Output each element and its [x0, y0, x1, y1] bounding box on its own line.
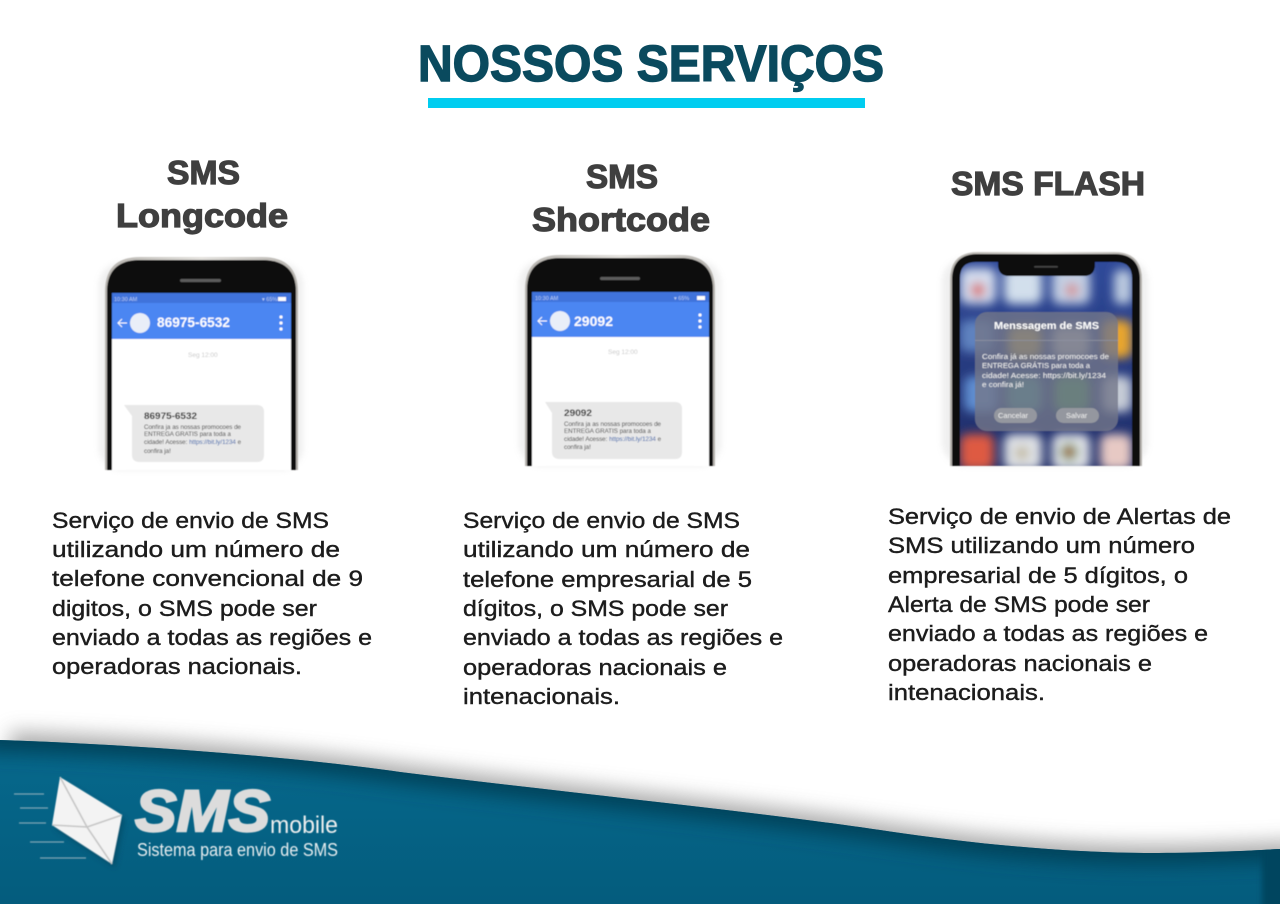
description: Longcode	[52, 508, 372, 679]
description: Shortcode: enviado a todas as regiões e	[463, 625, 783, 650]
panel: SMS Shortcode	[463, 158, 783, 709]
message bubble: ENTREGA GRATIS para toda a	[564, 428, 651, 435]
message bubble	[124, 405, 264, 462]
description: Flash: operadoras nacionais e	[888, 651, 1152, 676]
phone: longcode SMS screen	[99, 257, 303, 470]
description: Longcode: enviado a todas as regiões e	[52, 625, 372, 650]
logo word: mobile: mobile	[270, 812, 338, 839]
panel: SMS Flash	[888, 165, 1231, 705]
message bubble: 86975-6532	[144, 411, 197, 421]
message bubble: Confira ja as nossas promocoes de	[144, 424, 242, 431]
alert dialog: Salvar	[1066, 411, 1088, 420]
heading: SMS Longcode	[116, 154, 288, 234]
message bubble: cidade! Acesse: https://bit.ly/1234 e	[144, 439, 241, 446]
description: Flash: Serviço de envio de Alertas de	[888, 504, 1231, 529]
description: Shortcode: operadoras nacionais e	[463, 655, 727, 680]
message bubble: 29092	[564, 408, 592, 418]
alert dialog: Menssagem de SMS	[994, 320, 1099, 332]
description: Shortcode: Serviço de envio de SMS	[463, 508, 740, 533]
message bubble: Confira ja as nossas promocoes de	[564, 421, 662, 428]
description: Longcode: telefone convencional de 9	[52, 566, 363, 591]
phone: longcode SMS screen: 86975-6532	[157, 314, 230, 330]
description: Longcode: utilizando um número de	[52, 537, 340, 562]
phone: flash SMS alert screen	[942, 252, 1148, 470]
description: Longcode: operadoras nacionais.	[52, 654, 302, 679]
description: Shortcode: intenacionais.	[463, 684, 620, 709]
alert dialog: cidade! Acesse: https://bit.ly/1234	[982, 373, 1106, 380]
alert dialog: Cancelar	[998, 411, 1029, 420]
description: Shortcode	[463, 508, 783, 709]
alert dialog	[975, 312, 1118, 431]
description: Shortcode: telefone empresarial de 5	[463, 567, 752, 592]
alert dialog: ENTREGA GRÁTIS para toda a	[982, 361, 1090, 370]
description: Longcode: Serviço de envio de SMS	[52, 508, 329, 533]
description: Flash: SMS utilizando um número	[888, 533, 1195, 558]
heading: SMS Flash: SMS FLASH	[951, 165, 1145, 202]
panel: SMS Longcode	[52, 154, 372, 679]
footer wave band	[0, 732, 1280, 904]
logo: SMS mobile	[14, 777, 338, 868]
heading: SMS Longcode: Longcode	[116, 197, 288, 234]
heading: SMS Longcode: SMS	[167, 154, 240, 191]
phone: shortcode SMS screen	[519, 255, 721, 466]
alert dialog: e confira já!	[982, 382, 1024, 389]
phone: shortcode SMS screen: 10:30 AM	[535, 296, 559, 302]
description: Flash: Alerta de SMS pode ser	[888, 592, 1151, 617]
description: Shortcode: utilizando um número de	[463, 537, 750, 562]
icon: flying envelope	[14, 777, 125, 868]
message bubble	[545, 402, 682, 459]
phone: shortcode SMS screen: ▾ 65%	[674, 296, 689, 302]
heading: SMS Shortcode	[532, 158, 710, 238]
message bubble: confira ja!	[144, 448, 171, 455]
phone: longcode SMS screen: ▾ 65%	[262, 297, 277, 303]
description: Flash: intenacionais.	[888, 680, 1045, 705]
description: Flash: enviado a todas as regiões e	[888, 621, 1208, 646]
alert dialog: Confira já as nossas promocoes de	[982, 354, 1109, 361]
phone: shortcode SMS screen: 29092	[574, 313, 613, 329]
description: Flash: empresarial de 5 dígitos, o	[888, 563, 1188, 588]
heading: SMS Shortcode: Shortcode	[532, 201, 710, 238]
phone: longcode SMS screen: Seg 12:00	[188, 352, 218, 359]
logo wordmark: SMS	[135, 779, 270, 844]
description: Longcode: digitos, o SMS pode ser	[52, 596, 318, 621]
logo tagline: Sistema para envio de SMS	[137, 840, 338, 860]
message bubble: confira ja!	[564, 444, 591, 451]
phone: shortcode SMS screen: Seg 12:00	[608, 349, 638, 356]
message bubble: ENTREGA GRATIS para toda a	[144, 431, 231, 438]
description: Shortcode: dígitos, o SMS pode ser	[463, 596, 729, 621]
phone: longcode SMS screen: 10:30 AM	[114, 297, 138, 303]
message bubble: cidade! Acesse: https://bit.ly/1234 e	[564, 436, 661, 443]
heading: SMS Shortcode: SMS	[586, 158, 658, 195]
description: Flash	[888, 504, 1231, 705]
title: NOSSOS SERVIÇOS	[418, 35, 884, 92]
